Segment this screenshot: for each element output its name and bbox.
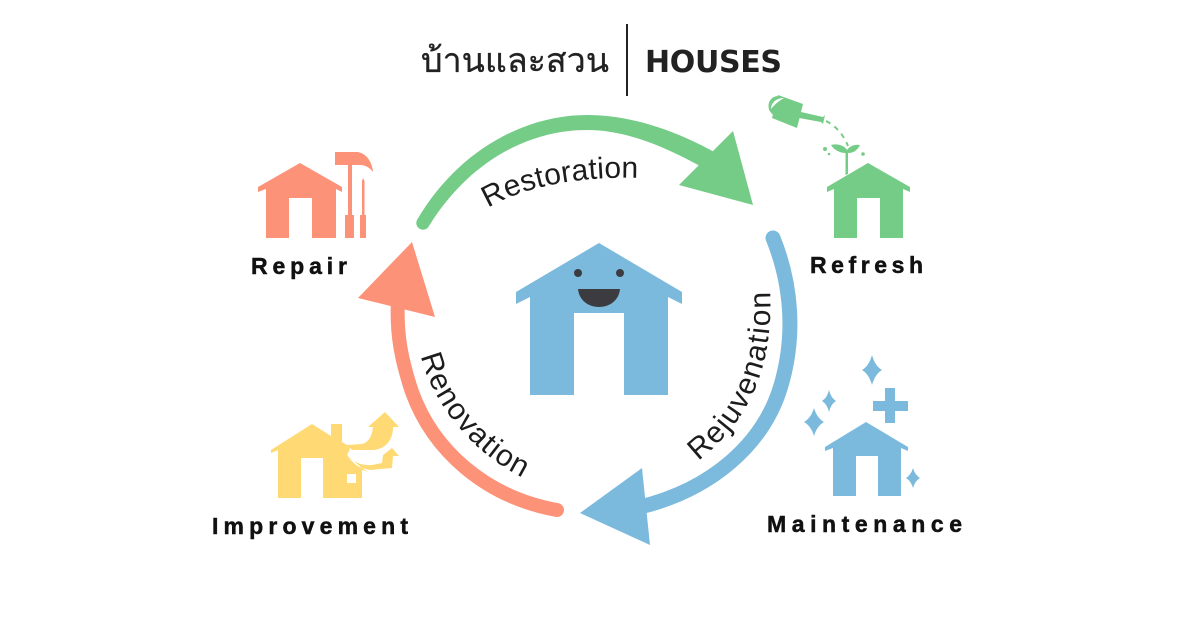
plus	[873, 388, 908, 423]
title: HOUSES: HOUSES	[645, 45, 782, 80]
label: Refresh: Refresh	[810, 252, 923, 278]
label: Renovation: Renovation	[421, 352, 527, 477]
central smiling house	[516, 243, 682, 395]
icon: refresh house with watering can	[768, 95, 910, 238]
upward arrow small	[347, 448, 399, 470]
hammer	[335, 152, 373, 238]
window	[347, 474, 356, 483]
water droplets	[826, 121, 848, 146]
eye left	[574, 269, 582, 277]
screwdriver	[360, 178, 366, 238]
smile	[578, 289, 620, 307]
arrow: Restoration (green)	[416, 115, 753, 230]
icon: repair house with tools	[258, 152, 373, 238]
eye right	[616, 269, 624, 277]
label: Restoration: Restoration	[480, 156, 636, 207]
title: Thai brand name: บ้านและสวน	[421, 42, 609, 80]
label: Rejuvenation: Rejuvenation	[686, 294, 770, 460]
watering can	[768, 95, 825, 128]
label: Repair: Repair	[251, 253, 347, 279]
icon: improvement house with arrows	[271, 412, 399, 498]
arrow: Rejuvenation (blue)	[580, 238, 790, 545]
icon: maintenance house with sparkles	[804, 355, 920, 496]
upward arrow large	[340, 412, 399, 450]
arrow: Renovation (salmon)	[358, 242, 557, 510]
label: Improvement: Improvement	[212, 513, 408, 539]
label: Maintenance: Maintenance	[767, 511, 962, 537]
sprout	[831, 144, 860, 175]
sparkles	[862, 355, 882, 385]
